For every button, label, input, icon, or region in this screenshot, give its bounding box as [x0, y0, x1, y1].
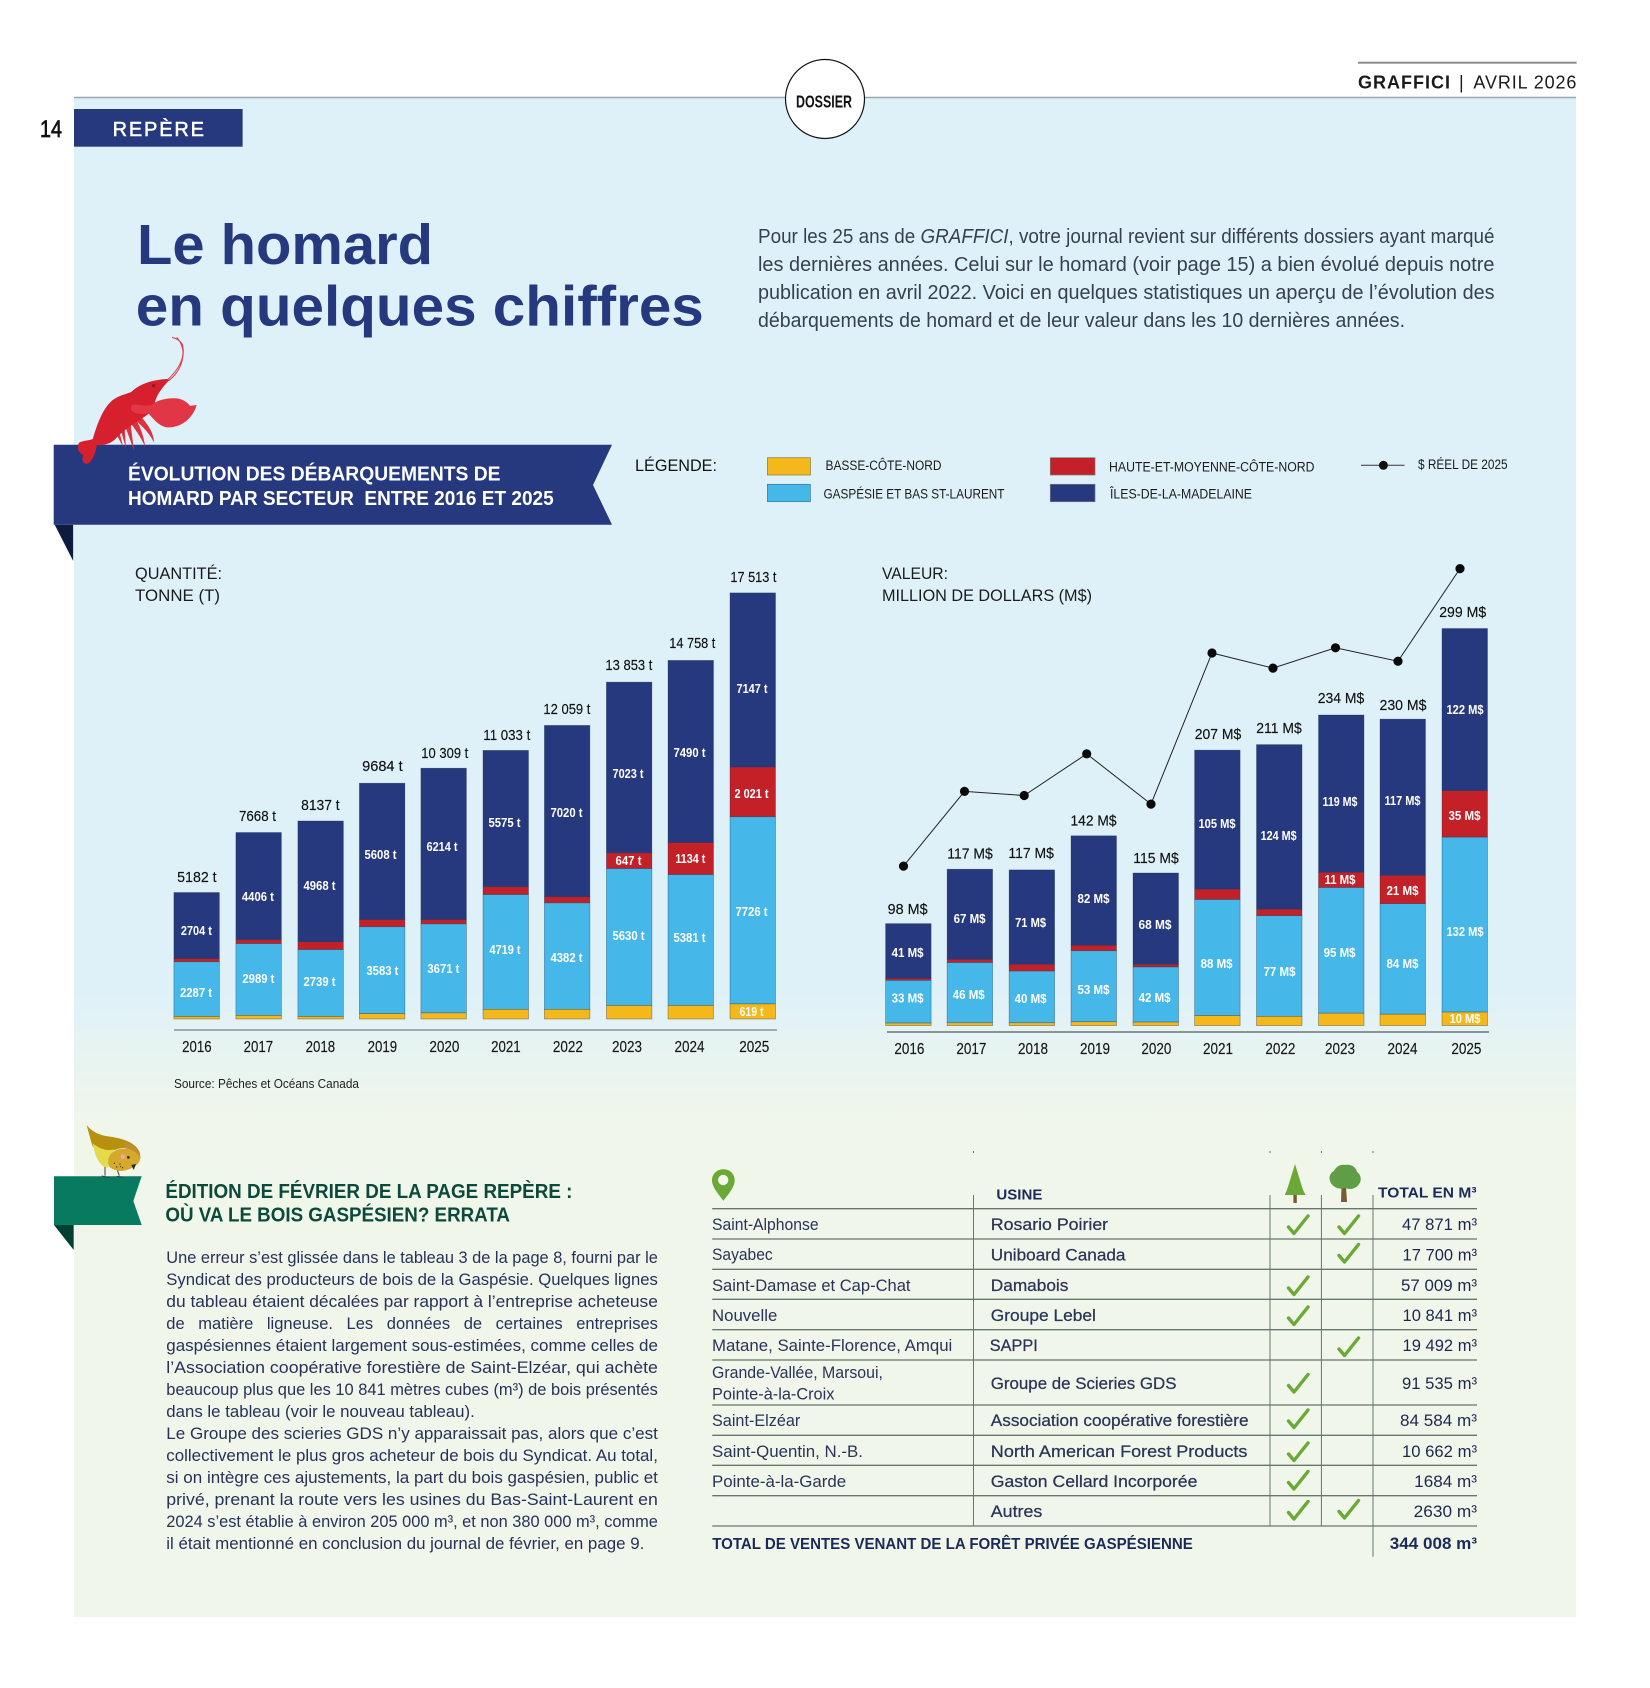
column: total en m³: 10 662 m³: [1402, 1442, 1477, 1461]
text block: errata: dans le tableau (voir le nouveau tableau).: [166, 1403, 475, 1421]
segment values: valeur: 71 M$: [1015, 916, 1046, 930]
column: usines: Uniboard Canada: [991, 1246, 1126, 1264]
column: usines: SAPPI: [990, 1336, 1038, 1355]
segment values: valeur: 82 M$: [1078, 892, 1110, 906]
segment values: quantité: 4382 t: [550, 951, 583, 965]
table headers: [996, 1184, 1476, 1203]
icon: bird: [87, 1125, 141, 1178]
line: $ réel de 2025: [899, 564, 1465, 871]
segment values: valeur: 33 M$: [892, 992, 924, 1006]
column: total en m³: [1400, 1215, 1477, 1521]
dossier badge: [786, 60, 864, 138]
segment values: valeur: 21 M$: [1386, 884, 1419, 898]
totals: quantité: 14 758 t: [669, 635, 716, 652]
icon: deciduous tree: [1330, 1165, 1361, 1202]
x axis years: valeur: 2019: [1080, 1041, 1110, 1058]
segment values: valeur: 132 M$: [1446, 925, 1484, 939]
segment values: quantité: 619 t: [740, 1005, 764, 1019]
segment values: valeur: 95 M$: [1324, 946, 1356, 960]
table grid: [712, 1151, 1477, 1557]
chart: valeur en millions de dollars: [882, 564, 1489, 1058]
segment values: valeur: 40 M$: [1015, 992, 1047, 1006]
x axis years: quantité: 2022: [553, 1039, 583, 1056]
column: usines: Rosario Poirier: [991, 1215, 1108, 1234]
publication header: GRAFFICI: [1358, 72, 1450, 92]
totals: quantité: 11 033 t: [483, 727, 531, 744]
column: usines: Groupe de Scieries GDS: [991, 1374, 1176, 1393]
x axis years: quantité: 2023: [612, 1039, 642, 1056]
column: total en m³: 10 841 m³: [1402, 1306, 1477, 1325]
icon: lobster: [78, 337, 197, 464]
legend item: haute-et-moyenne-côte-nord: HAUTE-ET-MOYENNE-CÔTE-NORD: [1109, 460, 1315, 475]
segment values: quantité: 5608 t: [364, 848, 397, 862]
x axis years: quantité: 2019: [368, 1039, 397, 1056]
segment values: valeur: 77 M$: [1264, 965, 1296, 979]
x axis years: valeur: 2017: [956, 1041, 986, 1058]
column: localités: Matane, Sainte-Florence, Amqui: [712, 1336, 952, 1355]
title: Le homard: [137, 213, 433, 277]
intro paragraph: Pour les 25 ans de GRAFFICI, votre journal revient sur différents dossiers ayant marqué: [758, 226, 1494, 248]
column: localités: Pointe-à-la-Croix: [712, 1384, 835, 1404]
table total row: 344 008 m³: [1390, 1534, 1477, 1553]
legend: [635, 456, 1508, 502]
heading: errata: [165, 1180, 572, 1227]
chart: valeur en millions de dollars: VALEUR:: [882, 564, 948, 583]
x axis years: valeur: 2016: [894, 1041, 924, 1058]
column: usines: Gaston Cellard Incorporée: [991, 1472, 1197, 1491]
segment values: quantité: 5630 t: [612, 929, 645, 943]
column: localités: Grande-Vallée, Marsoui,: [712, 1363, 883, 1382]
totals: valeur: [888, 604, 1487, 918]
totals: valeur: 211 M$: [1256, 720, 1302, 737]
column: total en m³: 17 700 m³: [1402, 1246, 1477, 1264]
stacked bars: valeur: [886, 628, 1488, 1026]
segment values: quantité: 2704 t: [181, 924, 213, 938]
legend item: basse-côte-nord: [767, 458, 942, 475]
segment values: quantité: [180, 682, 769, 1019]
totals: valeur: 142 M$: [1070, 812, 1117, 829]
text block: errata: du tableau étaient décalées par rapport à l’entreprise acheteuse: [166, 1293, 658, 1311]
stacked bars: quantité: [174, 593, 775, 1019]
icon: conifer tree: [1285, 1164, 1306, 1203]
title: en quelques chiffres: [136, 275, 704, 339]
totals: quantité: 9684 t: [362, 758, 403, 775]
segment values: valeur: 42 M$: [1139, 991, 1171, 1005]
legend: LÉGENDE:: [635, 456, 717, 475]
text block: errata: si on intègre ces ajustements, la part du bois gaspésien, public et: [166, 1469, 658, 1487]
column: usines: Damabois: [991, 1276, 1068, 1295]
section tag: repère: REPÈRE: [113, 118, 204, 141]
segment values: valeur: 67 M$: [954, 912, 986, 926]
segment values: quantité: 2 021 t: [734, 787, 769, 801]
column: usines: Association coopérative forestière: [991, 1411, 1248, 1430]
totals: valeur: 299 M$: [1439, 604, 1487, 621]
publication header: |: [1459, 72, 1464, 92]
segment values: quantité: 7147 t: [736, 682, 768, 696]
segment values: valeur: [892, 703, 1484, 1026]
segment values: quantité: 4406 t: [242, 890, 275, 904]
x axis years: quantité: [182, 1039, 769, 1056]
segment values: quantité: 4719 t: [490, 943, 521, 957]
column: total en m³: 19 492 m³: [1402, 1336, 1477, 1355]
title: [136, 213, 704, 339]
text block: errata: Une erreur s’est glissée dans le tableau 3 de la page 8, fourni par le: [166, 1249, 658, 1267]
text block: errata: 2024 s’est établie à environ 205 000 m³, et non 380 000 m³, comme: [166, 1513, 658, 1531]
column: localités: Nouvelle: [712, 1306, 777, 1325]
segment values: quantité: 3583 t: [366, 964, 399, 978]
totals: quantité: 13 853 t: [605, 657, 653, 674]
totals: quantité: 12 059 t: [543, 701, 591, 718]
column: usines: Autres: [991, 1502, 1042, 1521]
segment values: valeur: 41 M$: [892, 946, 924, 960]
intro paragraph: débarquements de homard et de leur valeur dans les 10 dernières années.: [758, 310, 1405, 332]
segment values: quantité: 7023 t: [612, 767, 644, 781]
table total row: [712, 1534, 1477, 1553]
segment values: valeur: 117 M$: [1384, 794, 1421, 808]
totals: valeur: 207 M$: [1195, 726, 1242, 743]
text block: errata: gaspésiennes étaient largement sous-estimées, comme celles de: [166, 1337, 658, 1355]
text block: errata: privé, prenant la route vers les usines du Bas-Saint-Laurent en: [166, 1491, 658, 1509]
column: localités: Pointe-à-la-Garde: [712, 1472, 846, 1491]
header rule: [74, 96, 1576, 98]
x axis years: quantité: 2020: [429, 1039, 460, 1056]
legend item: haute-et-moyenne-côte-nord: [1050, 458, 1315, 475]
column: total en m³: 84 584 m³: [1400, 1411, 1477, 1430]
page number: 14: [40, 116, 62, 143]
heading: errata: ÉDITION DE FÉVRIER DE LA PAGE REPÈRE :: [165, 1180, 572, 1203]
totals: valeur: 98 M$: [888, 901, 928, 918]
column: total en m³: 47 871 m³: [1402, 1215, 1477, 1234]
x axis years: quantité: 2021: [491, 1039, 521, 1056]
publication header: AVRIL 2026: [1473, 72, 1576, 92]
column: usines: Groupe Lebel: [991, 1306, 1096, 1325]
intro paragraph: publication en avril 2022. Voici en quelques statistiques un aperçu de l’évolution des: [758, 282, 1494, 304]
legend item: gaspésie: GASPÉSIE ET BAS ST-LAURENT: [824, 486, 1004, 501]
totals: valeur: 115 M$: [1133, 850, 1179, 867]
ribbon: green: [54, 1176, 142, 1250]
x axis years: quantité: 2016: [182, 1039, 212, 1056]
segment values: valeur: 105 M$: [1198, 817, 1236, 831]
segment values: quantité: 7020 t: [550, 806, 583, 820]
segment values: valeur: 68 M$: [1138, 918, 1172, 932]
x axis years: valeur: 2025: [1451, 1041, 1481, 1058]
totals: quantité: 8137 t: [301, 797, 340, 814]
publication header: [1358, 62, 1577, 92]
column: usines: North American Forest Products: [991, 1442, 1247, 1461]
segment values: valeur: 84 M$: [1386, 957, 1419, 971]
legend item: îles-de-la-madelaine: [1050, 484, 1252, 502]
segment values: valeur: 46 M$: [953, 988, 985, 1002]
text block: errata: Syndicat des producteurs de bois de la Gaspésie. Quelques lignes: [166, 1271, 658, 1289]
segment values: quantité: 2989 t: [242, 972, 275, 986]
chart: quantité en tonnes: TONNE (T): [135, 586, 220, 605]
icon: location pin: [712, 1169, 735, 1201]
totals: valeur: 117 M$: [1008, 845, 1054, 862]
table total row: TOTAL DE VENTES VENANT DE LA FORÊT PRIVÉE GASPÉSIENNE: [712, 1535, 1193, 1553]
segment values: quantité: 2287 t: [180, 986, 213, 1000]
column: total en m³: 57 009 m³: [1401, 1276, 1477, 1295]
text block: errata: collectivement le plus gros acheteur de bois du Syndicat. Au total,: [166, 1447, 658, 1465]
intro paragraph: les dernières années. Celui sur le homard (voir page 15) a bien évolué depuis notre: [758, 254, 1494, 276]
totals: quantité: 17 513 t: [730, 569, 777, 586]
segment values: quantité: 2739 t: [304, 975, 336, 989]
chart: quantité en tonnes: [135, 564, 777, 1056]
segment values: valeur: 53 M$: [1078, 983, 1110, 997]
section tag: repère: [74, 109, 243, 147]
legend item: $ réel: $ RÉEL DE 2025: [1418, 457, 1508, 472]
text block: errata: l’Association coopérative forestière de Saint-Elzéar, qui achète: [166, 1359, 658, 1377]
column: localités: Saint-Damase et Cap-Chat: [712, 1276, 911, 1295]
legend item: gaspésie: [767, 484, 1004, 502]
segment values: quantité: 5575 t: [488, 816, 521, 830]
x axis years: quantité: 2025: [739, 1039, 769, 1056]
x axis years: quantité: 2017: [244, 1039, 273, 1056]
segment values: valeur: 122 M$: [1446, 703, 1484, 717]
segment values: quantité: 4968 t: [304, 879, 336, 893]
text block: errata: il était mentionné en conclusion du journal de février, en page 9.: [166, 1535, 644, 1553]
dossier badge: DOSSIER: [796, 92, 852, 112]
x axis years: valeur: 2021: [1203, 1041, 1233, 1058]
x axis years: valeur: [894, 1041, 1481, 1058]
column: localités: Sayabec: [712, 1245, 773, 1264]
banner: évolution des débarquements: HOMARD PAR SECTEUR ENTRE 2016 ET 2025: [128, 488, 554, 510]
totals: quantité: 10 309 t: [421, 745, 469, 762]
x axis years: valeur: 2024: [1388, 1041, 1418, 1058]
totals: quantité: [177, 569, 777, 886]
text block: errata: beaucoup plus que les 10 841 mètres cubes (m³) de bois présentés: [166, 1381, 658, 1399]
table headers: TOTAL EN M³: [1378, 1184, 1476, 1201]
text block: errata: [166, 1249, 658, 1553]
segment values: valeur: 11 M$: [1324, 873, 1356, 887]
intro paragraph: [758, 226, 1494, 332]
segment values: quantité: 1134 t: [675, 852, 706, 866]
legend item: basse-côte-nord: BASSE-CÔTE-NORD: [826, 458, 942, 473]
banner: évolution des débarquements: ÉVOLUTION DES DÉBARQUEMENTS DE: [128, 463, 500, 486]
totals: quantité: 7668 t: [239, 808, 277, 825]
text block: errata: Le Groupe des scieries GDS n’y apparaissait pas, alors que c’est: [166, 1425, 658, 1443]
x axis years: quantité: 2024: [674, 1039, 705, 1056]
column: localités: [712, 1215, 952, 1491]
x axis years: valeur: 2023: [1325, 1041, 1355, 1058]
column: usines: [990, 1215, 1248, 1521]
column: total en m³: 2630 m³: [1414, 1502, 1477, 1521]
column: localités: Saint-Quentin, N.-B.: [712, 1442, 863, 1461]
totals: valeur: 234 M$: [1318, 690, 1365, 707]
x axis years: valeur: 2018: [1018, 1041, 1048, 1058]
legend item: îles-de-la-madelaine: ÎLES-DE-LA-MADELAINE: [1109, 486, 1252, 501]
table headers: USINE: [996, 1186, 1042, 1203]
totals: quantité: 5182 t: [177, 869, 217, 886]
column: total en m³: 1684 m³: [1414, 1472, 1477, 1491]
column: total en m³: 91 535 m³: [1402, 1374, 1477, 1393]
segment values: valeur: 35 M$: [1448, 809, 1481, 823]
totals: valeur: 117 M$: [947, 846, 993, 863]
segment values: valeur: 124 M$: [1261, 829, 1297, 843]
x axis years: quantité: 2018: [306, 1039, 335, 1056]
chart: quantité en tonnes: QUANTITÉ:: [135, 564, 222, 583]
totals: valeur: 230 M$: [1380, 697, 1427, 714]
check marks: [1288, 1216, 1358, 1519]
legend item: $ réel: [1361, 457, 1508, 472]
segment values: quantité: 7490 t: [674, 746, 706, 760]
segment values: valeur: 119 M$: [1322, 795, 1358, 809]
segment values: quantité: 6214 t: [426, 840, 458, 854]
segment values: quantité: 647 t: [616, 854, 642, 868]
segment values: valeur: 10 M$: [1450, 1012, 1481, 1026]
column: localités: Saint-Elzéar: [712, 1411, 801, 1430]
chart: valeur en millions de dollars: MILLION DE DOLLARS (M$): [882, 586, 1092, 605]
banner: évolution des débarquements: [54, 445, 612, 561]
segment values: valeur: 88 M$: [1201, 957, 1233, 971]
table: usines: [712, 1151, 1477, 1557]
heading: errata: OÙ VA LE BOIS GASPÉSIEN? ERRATA: [165, 1203, 510, 1227]
column: localités: Saint-Alphonse: [712, 1215, 819, 1234]
text block: errata: de matière ligneuse. Les données de certaines entreprises: [166, 1315, 658, 1333]
segment values: quantité: 5381 t: [674, 931, 706, 945]
x axis years: valeur: 2022: [1265, 1041, 1295, 1058]
source note: Source: Pêches et Océans Canada: [174, 1076, 360, 1091]
x axis years: valeur: 2020: [1141, 1041, 1172, 1058]
segment values: quantité: 3671 t: [427, 962, 460, 976]
segment values: quantité: 7726 t: [736, 905, 768, 919]
